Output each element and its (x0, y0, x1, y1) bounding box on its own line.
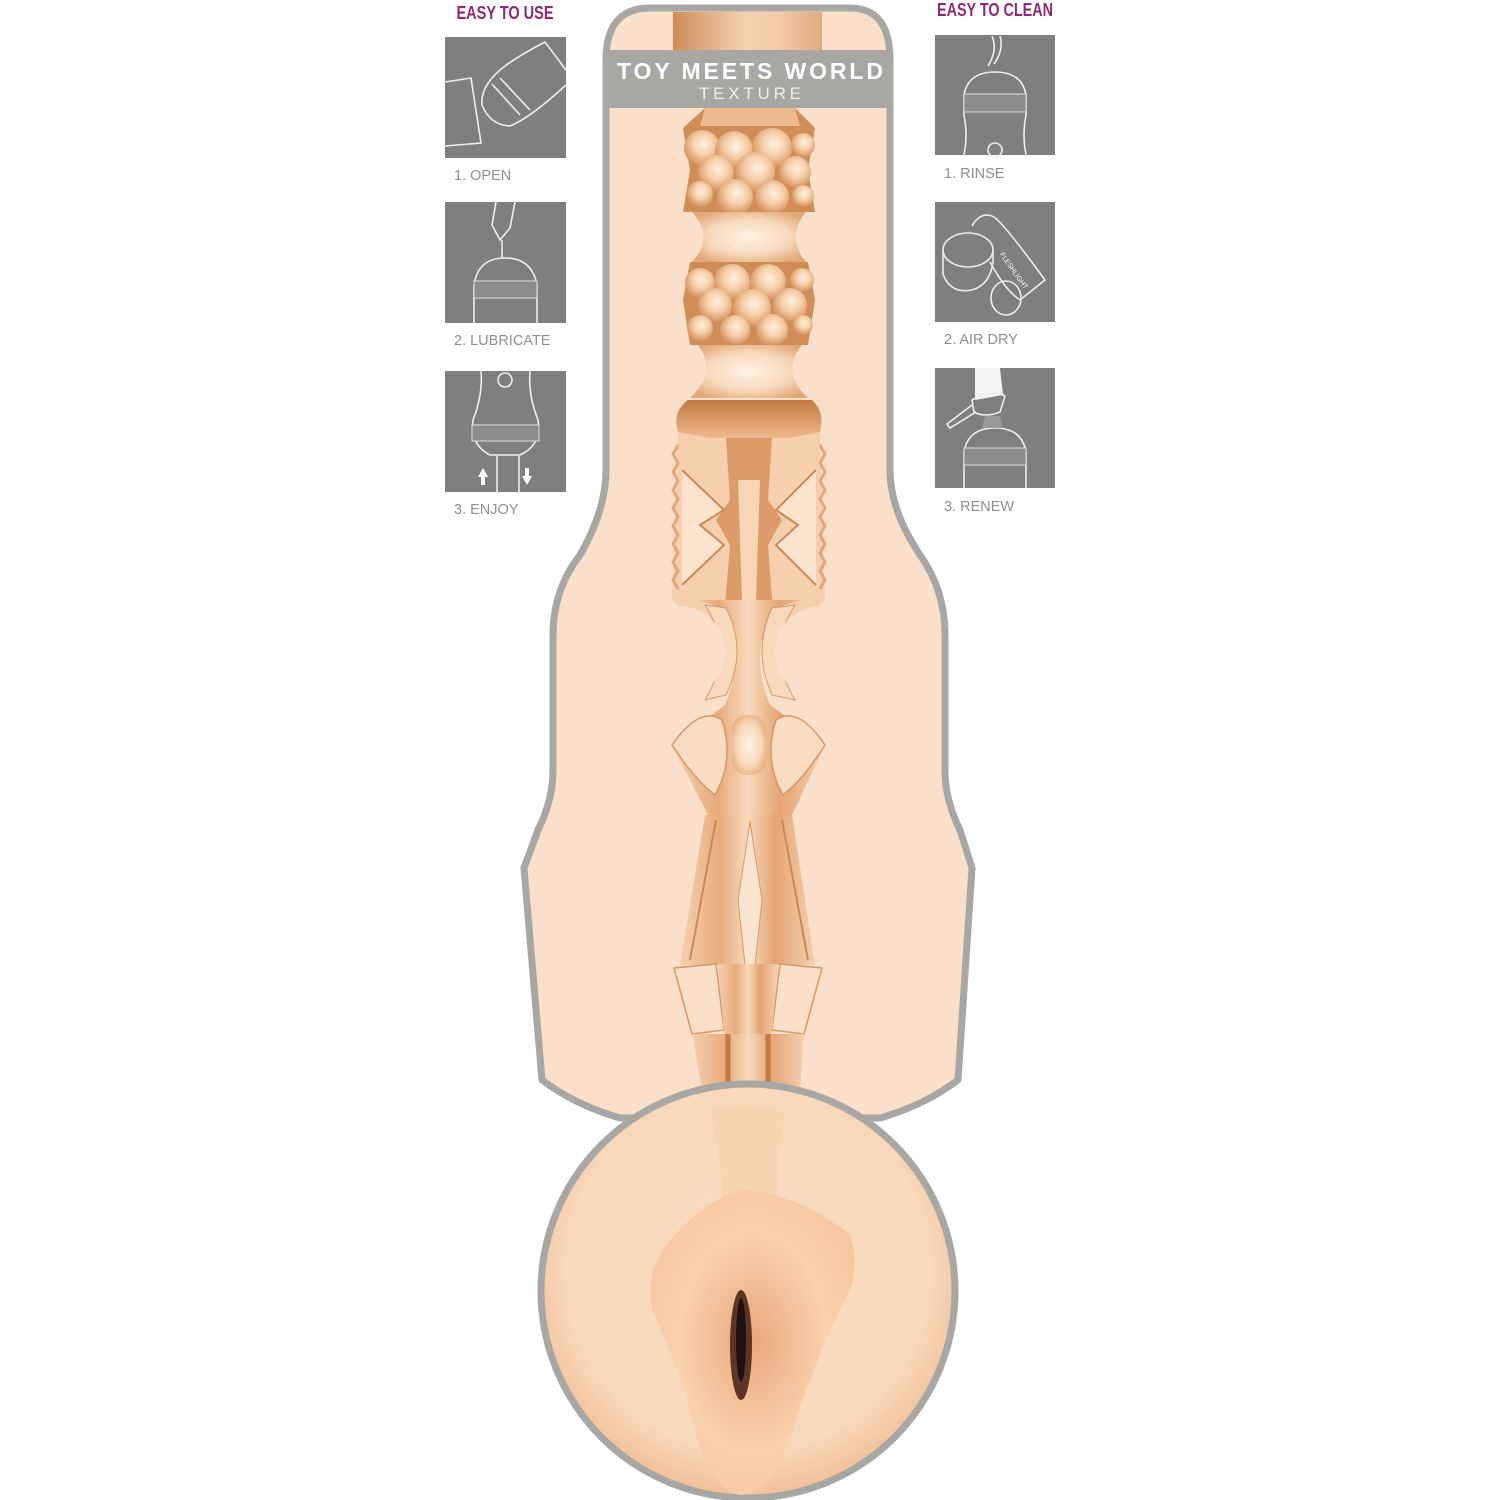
product cross-section body (524, 8, 972, 1118)
end cap circle (541, 1084, 955, 1498)
step 3 renew icon (935, 368, 1055, 488)
step 2 label: 2. LUBRICATE (454, 333, 551, 349)
neck 1 (692, 212, 806, 262)
step 1 open icon (445, 37, 566, 158)
title band (604, 50, 892, 108)
step 1 label: 1. RINSE (944, 166, 1005, 182)
step 3 label: 3. ENJOY (454, 502, 519, 518)
ribbed chamber (672, 400, 825, 640)
heading: easy to use: EASY TO USE (456, 3, 554, 23)
middle chamber (672, 600, 825, 815)
heading: easy to clean: EASY TO CLEAN (937, 0, 1053, 20)
top channel (673, 12, 822, 52)
panel: easy to use (445, 3, 566, 518)
step 1 rinse icon (935, 35, 1055, 157)
step 2 lubricate icon (445, 202, 566, 323)
panel: easy to clean (935, 0, 1055, 515)
step 1 label: 1. OPEN (454, 168, 511, 184)
title text: TOY MEETS WORLD (617, 58, 883, 84)
step 2 air dry icon (935, 202, 1055, 322)
step 2 air dry icon: FLESHLIGHT (998, 251, 1029, 291)
lower channel (674, 964, 822, 1090)
inner canal (633, 12, 867, 1090)
step 2 label: 2. AIR DRY (944, 332, 1018, 348)
textured chamber 2 (683, 262, 815, 346)
step 3 enjoy icon (445, 371, 566, 492)
subtitle text: TEXTURE (699, 84, 801, 103)
tapered channel (680, 815, 815, 965)
end cap moulded form (650, 1105, 855, 1495)
circular cutouts (633, 606, 867, 698)
step 3 label: 3. RENEW (944, 499, 1014, 515)
neck 2 (690, 345, 808, 398)
textured chamber 1 (683, 108, 815, 215)
